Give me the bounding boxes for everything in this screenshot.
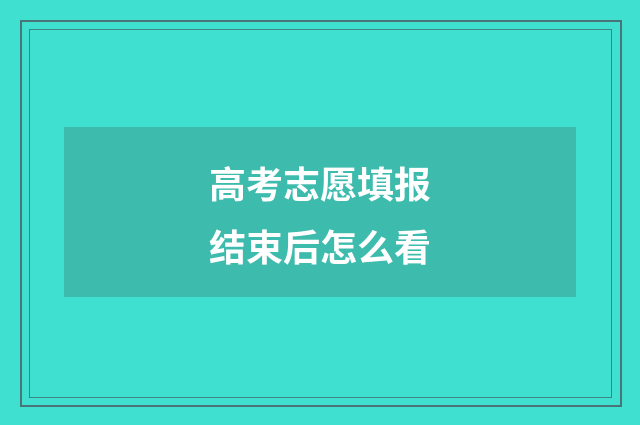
title panel xyxy=(64,127,576,297)
title line 2: 结束后怎么看 xyxy=(209,228,431,269)
title line 1: 高考志愿填报 xyxy=(209,165,431,206)
inner frame xyxy=(29,29,612,398)
